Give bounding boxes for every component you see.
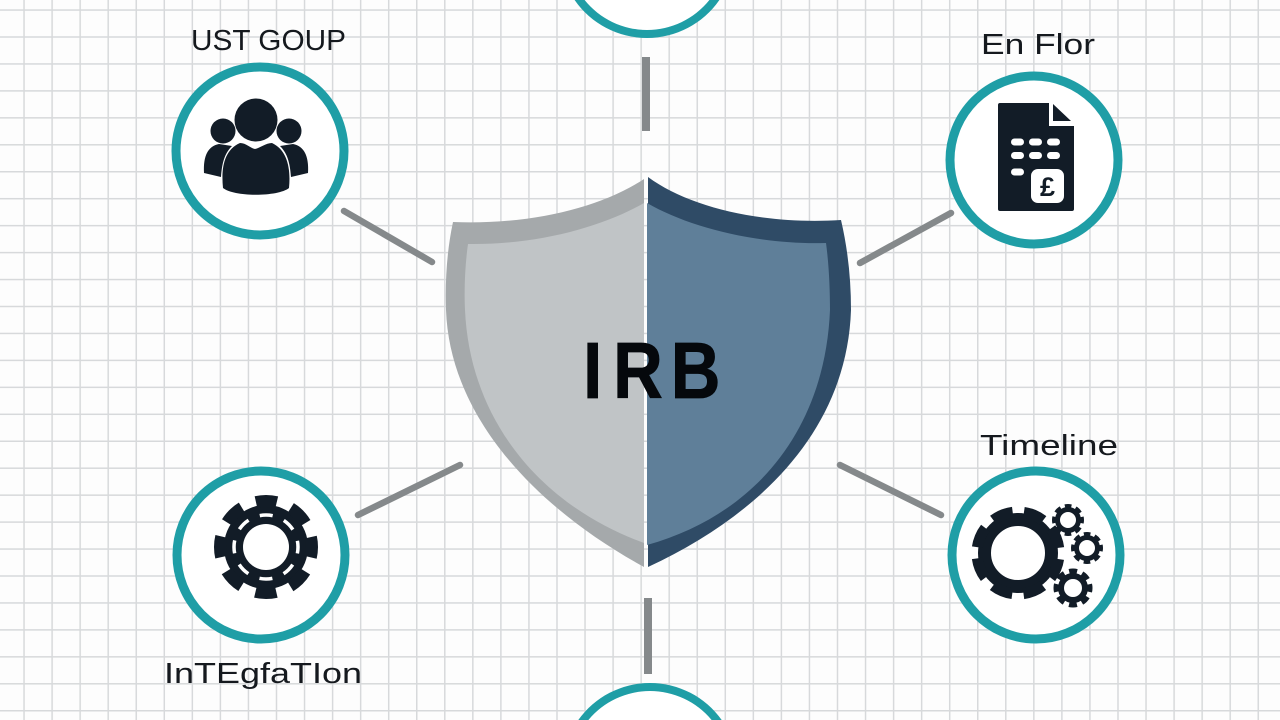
label: timeline: Timeline: [980, 430, 1118, 462]
connector: top: [642, 57, 650, 131]
ring: [952, 471, 1120, 639]
connector: bottom: [644, 598, 652, 674]
icon: gears: [964, 499, 1101, 607]
shield title: IRB: [583, 325, 720, 415]
node: user group: [176, 25, 346, 235]
connector: lower right: [840, 465, 941, 515]
ring: [176, 67, 344, 235]
node: top (cropped): [575, 0, 719, 38]
node: en flor: [950, 29, 1118, 244]
ring: [177, 471, 345, 639]
label: integration: InTEgfaTIon: [164, 658, 362, 690]
label: en flor: En Flor: [981, 29, 1095, 61]
central shield: [446, 177, 851, 567]
connector: upper left: [344, 211, 432, 262]
label: user group: UST GOUP: [191, 25, 346, 57]
icon: people: [204, 98, 308, 195]
connector: upper right: [860, 213, 951, 263]
node: timeline: [952, 430, 1120, 639]
shield right half: [647, 177, 851, 567]
node: bottom (cropped): [578, 683, 722, 720]
icon: document: [998, 103, 1074, 211]
icon: document: £: [1040, 172, 1055, 202]
icon: gear: [220, 501, 312, 593]
ring: [950, 76, 1118, 244]
connector: lower left: [358, 465, 460, 515]
shield left half: [446, 179, 644, 567]
node: integration: [164, 471, 362, 690]
